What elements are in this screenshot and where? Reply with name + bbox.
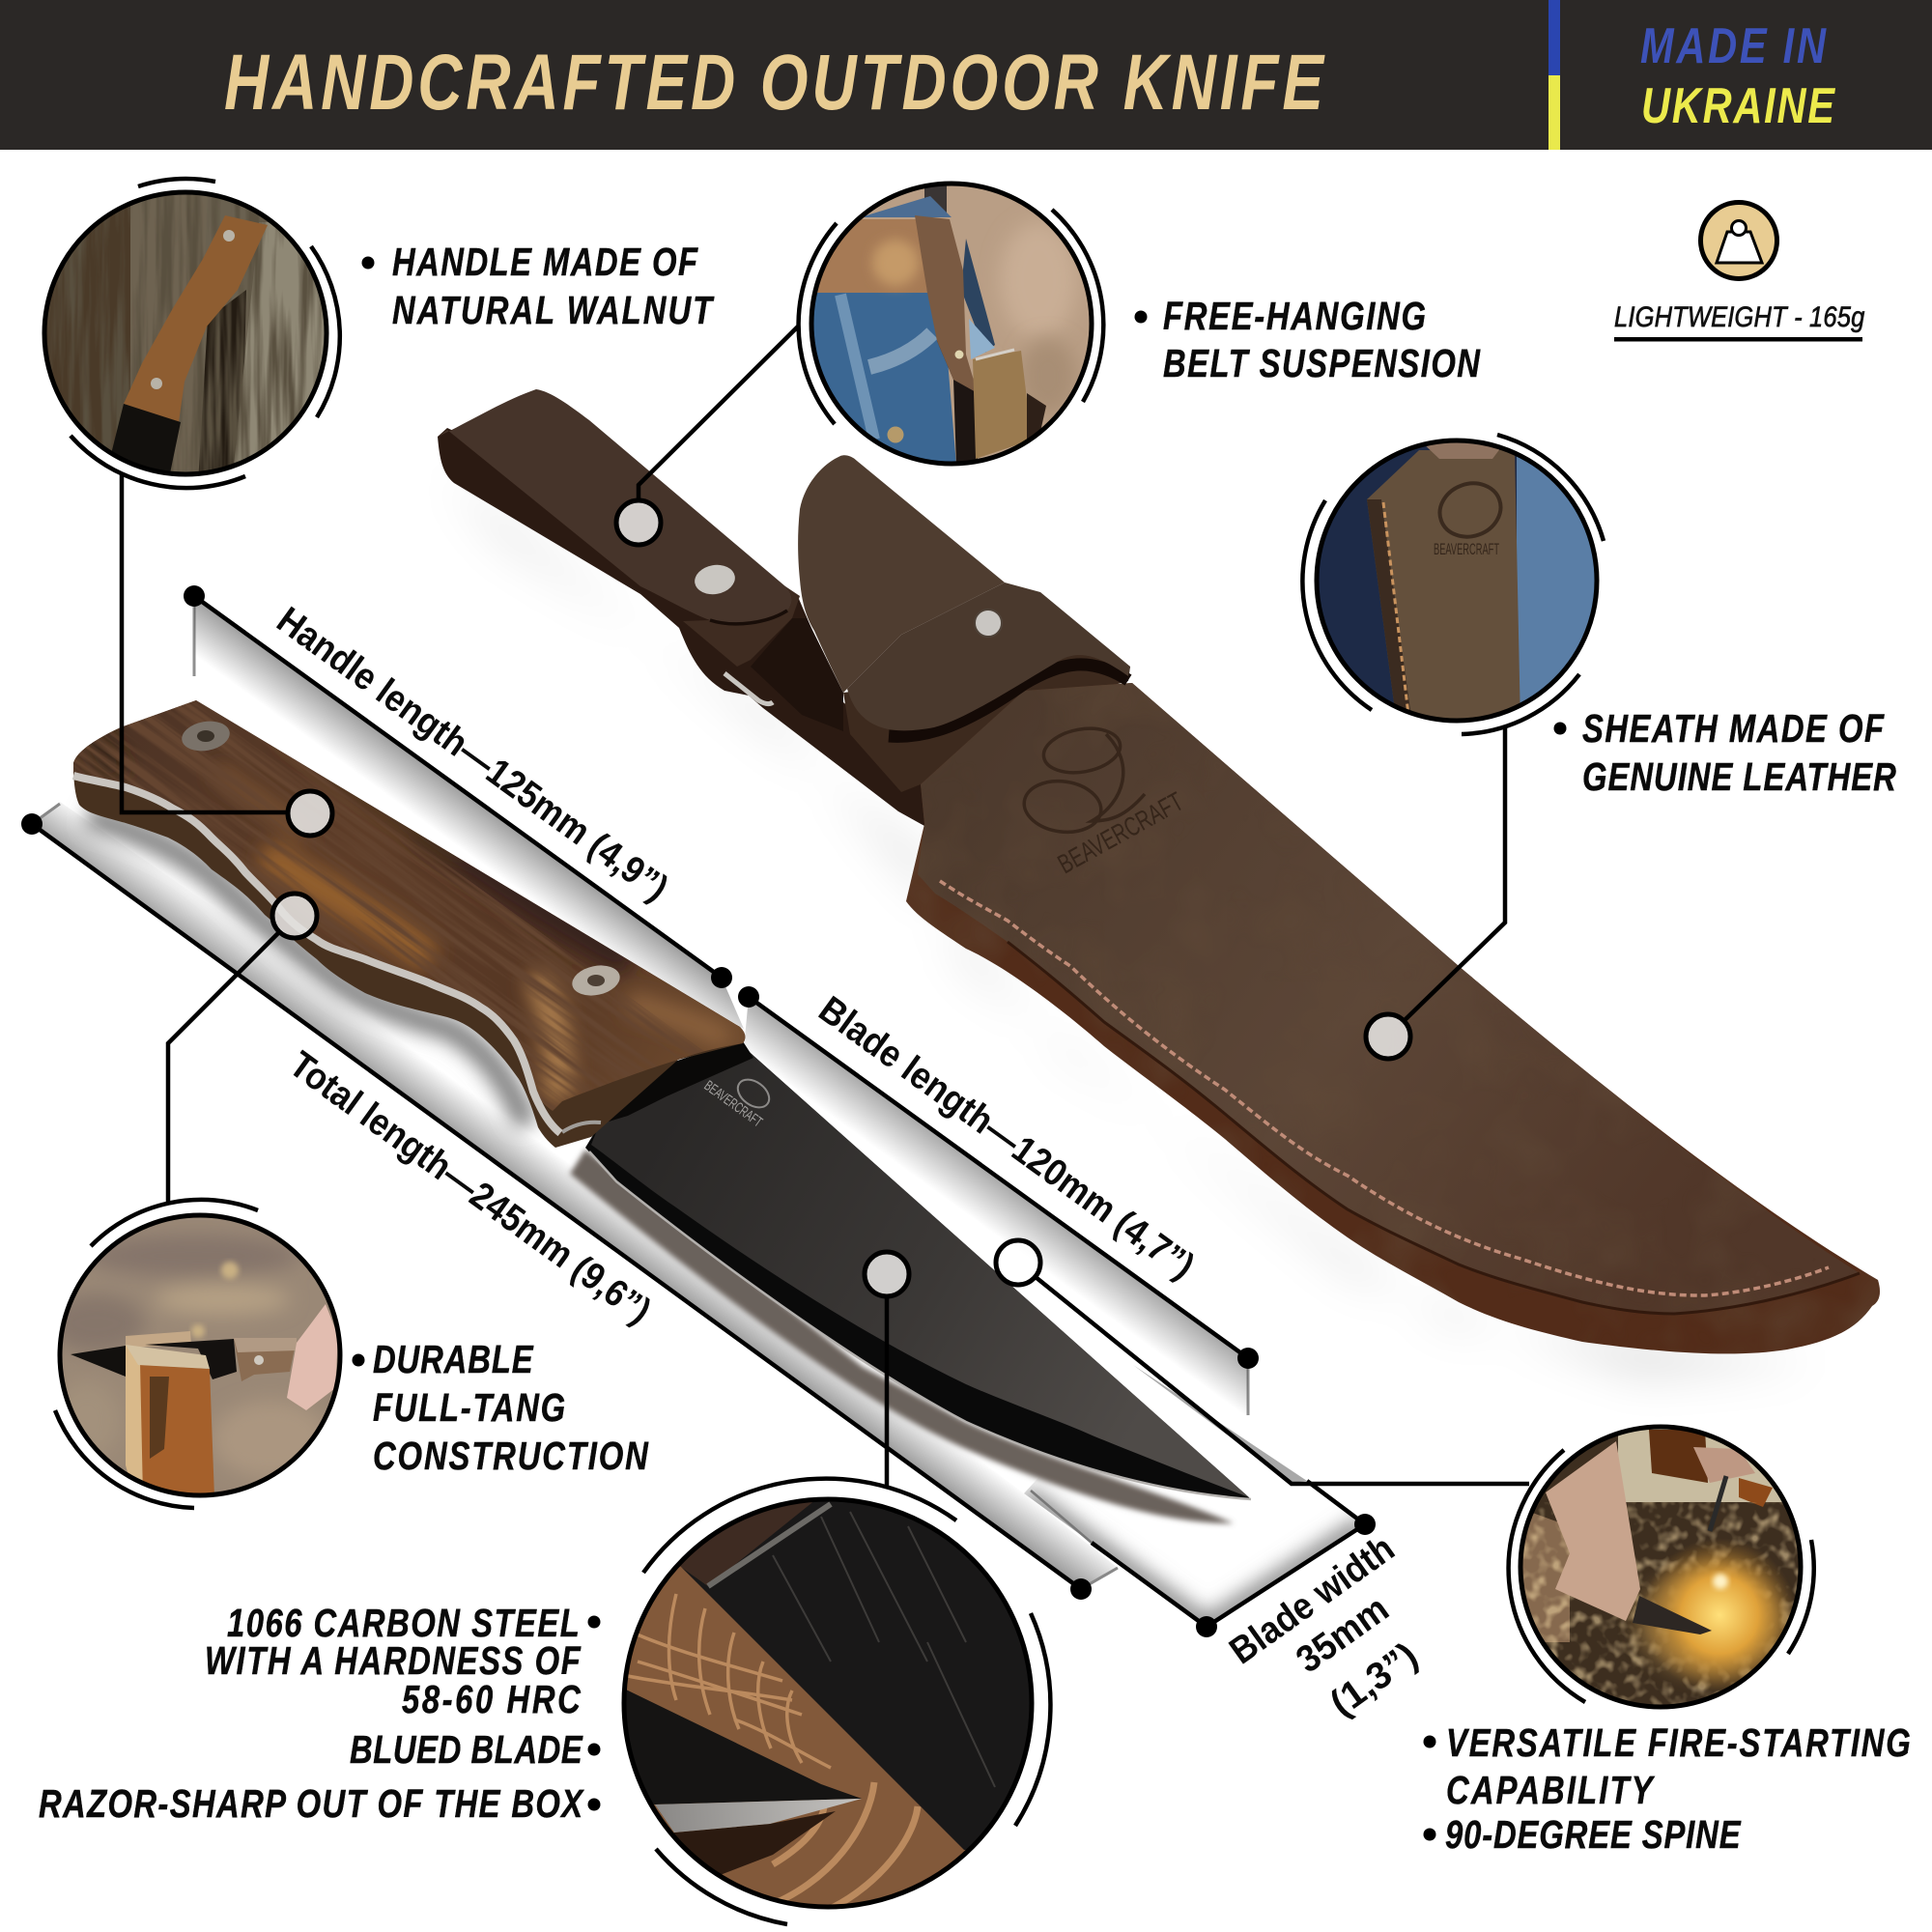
blade reflection [570, 1150, 1234, 1523]
text: 1066 CARBON STEEL [227, 1600, 580, 1645]
header banner [0, 0, 1932, 150]
dim: handle length [184, 585, 732, 988]
label: blade width: (1,3”) [1322, 1634, 1426, 1724]
marker [865, 1252, 909, 1296]
sheath logo: BEAVERCRAFT [1053, 786, 1188, 879]
made in ukraine: MADE IN [1640, 17, 1827, 73]
marker [272, 894, 317, 938]
text [39, 1600, 601, 1826]
sheath strap tab [847, 582, 1130, 730]
text: CONSTRUCTION [373, 1433, 649, 1478]
underline [1614, 337, 1862, 342]
text: BLUED BLADE [350, 1726, 583, 1772]
connector [1401, 726, 1505, 1024]
arcs [1509, 1450, 1814, 1702]
sheath drop shadow [444, 473, 1816, 1377]
title: HANDCRAFTED OUTDOOR KNIFE [224, 37, 1325, 127]
connector [168, 931, 280, 1203]
label: handle length: Handle length—125mm (4,9”) [270, 599, 675, 909]
tang [562, 1122, 601, 1132]
sheath body [906, 683, 1880, 1354]
text: NATURAL WALNUT [392, 287, 715, 332]
band: blade length [744, 997, 1248, 1420]
text: 58-60 HRC [402, 1676, 582, 1721]
label: total length: Total length—245mm (9,6”) [282, 1043, 658, 1332]
wedge near blade width [1133, 1365, 1307, 1483]
callout: sheath leather [1302, 435, 1896, 1059]
text: FULL-TANG [373, 1384, 565, 1430]
flag bar [1548, 0, 1560, 150]
arcs [799, 210, 1103, 424]
sheath flap [798, 455, 1005, 693]
text [352, 1336, 649, 1478]
photo: belt [811, 184, 1094, 466]
dimension labels [270, 599, 1426, 1724]
text: RAZOR-SHARP OUT OF THE BOX [39, 1780, 584, 1826]
blade logo [701, 1074, 775, 1130]
blade [585, 1046, 1251, 1499]
dimension lines [21, 585, 1376, 1637]
blade logo: BEAVERCRAFT [701, 1077, 765, 1130]
text: FREE-HANGING [1163, 293, 1426, 338]
made in ukraine [1640, 17, 1835, 133]
photo: sheath: BEAVERCRAFT [1434, 540, 1499, 558]
arcs [55, 1200, 258, 1508]
rivet: front [569, 961, 623, 1000]
text: WITH A HARDNESS OF [205, 1637, 582, 1683]
text: VERSATILE FIRE-STARTING [1446, 1719, 1911, 1765]
silver liner [73, 776, 560, 1133]
callout: carbon steel [39, 1252, 1050, 1924]
made in ukraine: UKRAINE [1641, 77, 1835, 133]
strap snap [975, 610, 1002, 637]
marker [616, 500, 661, 545]
text [361, 239, 715, 332]
callout: handle walnut [39, 179, 715, 836]
sheath logo [1021, 723, 1188, 879]
text: BELT SUSPENSION [1163, 340, 1481, 385]
arcs [1302, 435, 1604, 734]
dimension bands [32, 596, 1372, 1633]
under-tab gap [889, 665, 1128, 736]
arcs [71, 179, 340, 488]
text [1424, 1719, 1911, 1857]
label: blade width: 35mm [1289, 1588, 1397, 1681]
icon: weight [1700, 203, 1777, 278]
dim: total length [21, 804, 1118, 1600]
arcs [643, 1479, 1050, 1924]
text: GENUINE LEATHER [1582, 753, 1896, 799]
text [1134, 293, 1481, 385]
back strap pieces [751, 618, 843, 731]
text [1553, 705, 1896, 799]
belt loop [438, 389, 927, 826]
text: DURABLE [373, 1336, 534, 1381]
band: blade width [1024, 1480, 1355, 1619]
photo: steel closeup [618, 1488, 1043, 1918]
callout: belt suspension [616, 184, 1481, 545]
text: SHEATH MADE OF [1582, 705, 1885, 751]
photo: walnut handle [39, 184, 338, 483]
callout: fire starting [996, 1240, 1911, 1857]
text: HANDLE MADE OF [392, 239, 698, 284]
dim: blade length [738, 986, 1259, 1415]
connector [122, 474, 287, 812]
label: blade width [1222, 1527, 1426, 1724]
callout: full tang [48, 894, 649, 1508]
photo: fire [1517, 1425, 1806, 1715]
label: LIGHTWEIGHT - 165g [1614, 300, 1865, 332]
label: blade length: Blade length—120mm (4,7”) [811, 988, 1202, 1288]
stitching [940, 881, 1829, 1295]
rivet: butt [180, 718, 232, 754]
connector [885, 1296, 889, 1487]
wood figure [73, 701, 734, 1110]
connector [1036, 1277, 1529, 1484]
sheath with belt loop [438, 389, 1893, 1377]
wood crack lines [628, 1594, 918, 1913]
dim: blade width [1031, 1481, 1376, 1637]
handle shadow [87, 816, 526, 1125]
knife [0, 609, 1251, 1523]
marker [1366, 1014, 1410, 1059]
lower strap layer [843, 647, 1130, 792]
photo: baton [48, 1212, 343, 1497]
photo: sheath [1314, 440, 1604, 725]
handle [72, 700, 746, 1148]
band: handle length [194, 596, 744, 1029]
text: 90-DEGREE SPINE [1445, 1811, 1742, 1857]
label: blade width: Blade width [1222, 1527, 1402, 1672]
handle junction shadow [562, 1041, 753, 1130]
connector [639, 327, 798, 500]
marker [288, 791, 332, 836]
feature: lightweight [1614, 203, 1865, 342]
marker [996, 1240, 1040, 1285]
band: total length [32, 802, 1118, 1589]
text: CAPABILITY [1446, 1767, 1655, 1812]
